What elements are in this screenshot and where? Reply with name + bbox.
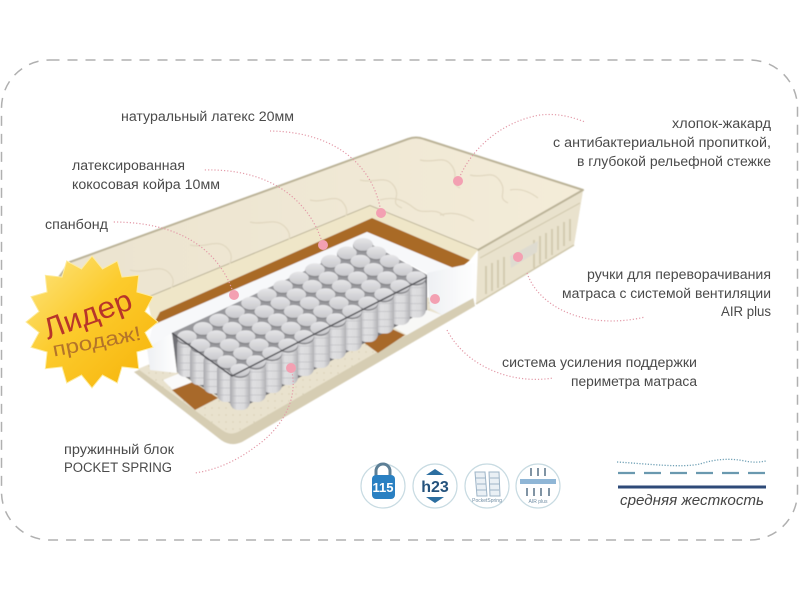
- label: perimeter support: [502, 355, 698, 389]
- label: latex coconut coir: латексированная: [72, 158, 185, 173]
- label: turning handles: AIR plus: [721, 304, 771, 319]
- icon: pocket spring: [465, 464, 509, 508]
- label: cotton jacquard: с антибактериальной пропиткой,: [553, 135, 771, 150]
- label: latex coconut coir: кокосовая койра 10мм: [72, 177, 220, 192]
- pocket spring block: [172, 238, 427, 410]
- icon: 115 kg load: [361, 464, 405, 508]
- mattress base latex layer: [134, 297, 475, 444]
- label: latex coconut coir: [72, 158, 220, 192]
- dashed rounded frame: [2, 60, 798, 540]
- callout line: cotton jacquard: [458, 114, 585, 181]
- label: pocket spring: POCKET SPRING: [64, 460, 172, 475]
- callout line: pocket spring: [195, 368, 293, 473]
- icon: air plus: [516, 464, 560, 508]
- icon: height 23: h23: [421, 479, 449, 496]
- mattress side panel with ventilation: [476, 191, 583, 304]
- coconut coir inserts on base: [172, 328, 405, 410]
- icon: air plus: AIR plus: [529, 499, 548, 505]
- callout line: spunbond: [113, 222, 234, 295]
- label: pocket spring: пружинный блок: [64, 442, 174, 457]
- label: turning handles: матраса с системой вентиляции: [562, 286, 771, 301]
- icon: pocket spring: PocketSpring: [472, 498, 502, 504]
- icon: height 23: [413, 464, 457, 508]
- badge: sales leader: продаж!: [51, 323, 143, 361]
- badge: sales leader: [26, 256, 158, 388]
- label: natural latex: натуральный латекс 20мм: [121, 109, 294, 124]
- quilted jacquard top surface: [50, 138, 583, 330]
- label: turning handles: ручки для переворачивания: [587, 267, 771, 282]
- label: perimeter support: система усиления поддержки: [502, 355, 697, 370]
- label: turning handles: [562, 267, 771, 319]
- coconut coir layer: [153, 218, 470, 325]
- badge: sales leader: Лидер: [39, 284, 137, 346]
- callout line: coconut coir: [203, 170, 323, 245]
- medium firmness scale: средняя жесткость: [620, 492, 764, 509]
- latex layer strip: [147, 206, 478, 325]
- callout line: perimeter support: [447, 330, 553, 379]
- callout dots: [229, 176, 523, 373]
- medium firmness scale: [617, 459, 766, 509]
- label: pocket spring: [64, 442, 174, 475]
- label: cotton jacquard: в глубокой рельефной стежке: [577, 154, 771, 169]
- icon: 115 kg load: 115: [373, 480, 393, 495]
- label: perimeter support: периметра матраса: [571, 374, 698, 389]
- label: spunbond: спанбонд: [45, 217, 108, 232]
- callout line: natural latex: [270, 131, 381, 213]
- label: cotton jacquard: [553, 116, 771, 169]
- white perimeter foam: [147, 232, 477, 390]
- label: cotton jacquard: хлопок-жакард: [672, 116, 771, 131]
- mattress illustration: [50, 138, 583, 444]
- callout line: handles: [527, 273, 645, 321]
